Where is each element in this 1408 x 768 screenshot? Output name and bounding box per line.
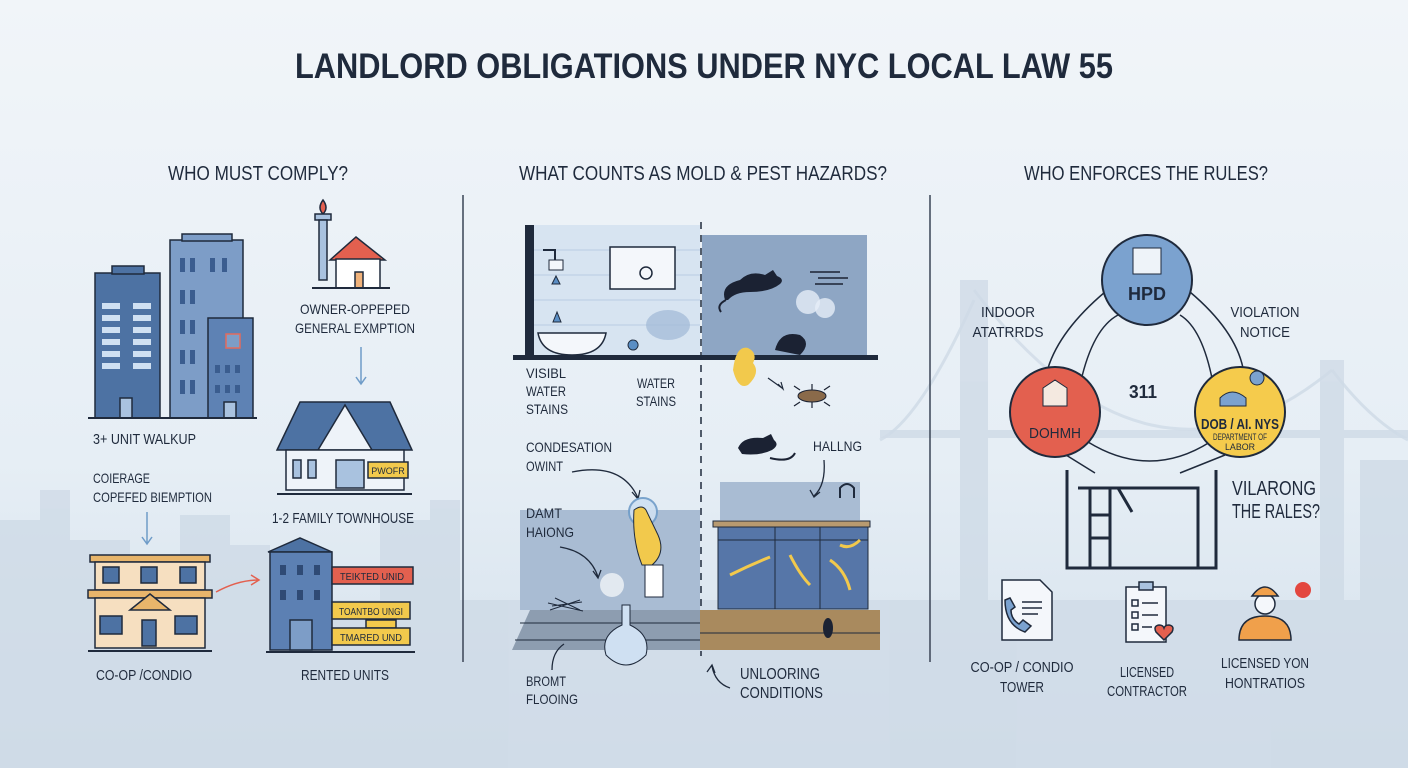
panel: who enforces: HONTRATIOS <box>1225 675 1305 692</box>
label: 1-2 family townhouse: 1-2 FAMILY TOWNHOUSE <box>272 510 414 527</box>
label: 3+ unit walkup: 3+ UNIT WALKUP <box>93 431 196 448</box>
illustration: damp room <box>512 498 700 665</box>
icon: DOB circle <box>1195 367 1285 457</box>
panel: who must comply: COPEFED BIEMPTION <box>93 489 212 505</box>
icon: HPD circle <box>1102 235 1192 325</box>
icon: DOHMH circle <box>1010 367 1100 457</box>
icon: townhouse <box>277 402 412 494</box>
icon: DOB circle: DEPARTMENT OF <box>1213 432 1267 442</box>
icon: DOB circle: LABOR <box>1225 442 1255 452</box>
heading: hazards: WHAT COUNTS AS MOLD & PEST HAZARDS? <box>519 163 887 185</box>
icon: co-op building <box>88 555 212 651</box>
icon: DOHMH circle: DOHMH <box>1029 425 1081 442</box>
panel: who must comply: PWOFR <box>371 466 405 476</box>
panel: who must comply: TEIKTED UNID <box>340 572 404 583</box>
panel: who enforces <box>970 163 1320 700</box>
icon: construction worker <box>1239 587 1291 640</box>
label: violating the rules: VILARONG <box>1232 478 1316 500</box>
label: violation notice: VIOLATION <box>1230 304 1300 321</box>
label: rented units: RENTED UNITS <box>301 667 389 684</box>
label: flooring: BROMT <box>526 673 566 689</box>
label: hallway: HALLNG <box>813 438 862 454</box>
label: indoor standards: INDOOR <box>981 304 1035 321</box>
panel: who must comply <box>88 163 415 684</box>
panel: mold and pest hazards <box>512 163 887 707</box>
panel: mold and pest hazards: WATER <box>526 383 566 399</box>
label: co-op/condo: CO-OP /CONDIO <box>96 667 192 684</box>
panel: mold and pest hazards: FLOOING <box>526 691 578 707</box>
icon: clipboard <box>1126 582 1173 642</box>
title: LANDLORD OBLIGATIONS UNDER NYC LOCAL LAW 55 <box>295 47 1113 86</box>
panel: who enforces: LICENSED <box>1120 664 1174 681</box>
panel: mold and pest hazards: CONDITIONS <box>740 685 823 702</box>
label: coverage exemption: COIERAGE <box>93 470 150 486</box>
icon: phone document <box>1002 580 1052 640</box>
label: 311: 311 <box>1129 382 1157 402</box>
panel: who must comply: TOANTBO UNGI <box>339 607 403 618</box>
label: damp hallway: DAMT <box>526 505 562 521</box>
icon: apartment towers <box>88 234 257 418</box>
panel: mold and pest hazards: STAINS <box>636 393 676 409</box>
panel: mold and pest hazards: OWINT <box>526 458 563 474</box>
panel: who enforces: NOTICE <box>1240 324 1290 341</box>
icon: building floor plan <box>1067 470 1216 568</box>
panel: who enforces: CONTRACTOR <box>1107 683 1187 700</box>
label: unlooring conditions: UNLOORING <box>740 666 820 683</box>
panel: who enforces: TOWER <box>1000 679 1044 696</box>
icon: DOB circle: DOB / AI. NYS <box>1201 416 1279 433</box>
label: condensation: CONDESATION <box>526 439 612 455</box>
arrow: down to co-op <box>142 512 152 544</box>
arrows: enforcement cycle <box>1048 292 1243 473</box>
illustration: bathroom water leak <box>513 225 878 360</box>
labels: bottom: CO-OP / CONDIO <box>970 659 1074 676</box>
background skyline <box>0 280 1408 768</box>
arrow: down to townhouse <box>356 347 366 384</box>
panel: who enforces: LICENSED YON <box>1221 655 1309 672</box>
heading: who must comply: WHO MUST COMPLY? <box>168 163 348 185</box>
panel: who enforces: THE RALES? <box>1232 501 1320 523</box>
icon: red dot <box>1295 582 1311 598</box>
icon: rented building with unit tags <box>266 538 415 652</box>
label: owner-occupied exemption: OWNER-OPPEPED <box>300 301 410 317</box>
illustration: pests in wall <box>702 235 867 408</box>
panel: mold and pest hazards: STAINS <box>526 401 568 417</box>
panel: mold and pest hazards: HAIONG <box>526 524 574 540</box>
panel: mold and pest hazards: WATER <box>637 375 675 391</box>
panel: who must comply: TMARED UND <box>340 633 402 644</box>
divider: dashed <box>700 222 702 656</box>
labels: water stains: VISIBL <box>526 365 566 381</box>
panel: who must comply: GENERAL EXMPTION <box>295 320 415 336</box>
illustration: kitchen pests <box>700 434 880 650</box>
icon: HPD circle: HPD <box>1128 284 1166 304</box>
heading: enforcers: WHO ENFORCES THE RULES? <box>1024 163 1268 185</box>
arrow: co-op to rented <box>216 575 259 592</box>
panel: who enforces: ATATRRDS <box>972 324 1044 341</box>
icon: torch and house <box>312 200 390 288</box>
